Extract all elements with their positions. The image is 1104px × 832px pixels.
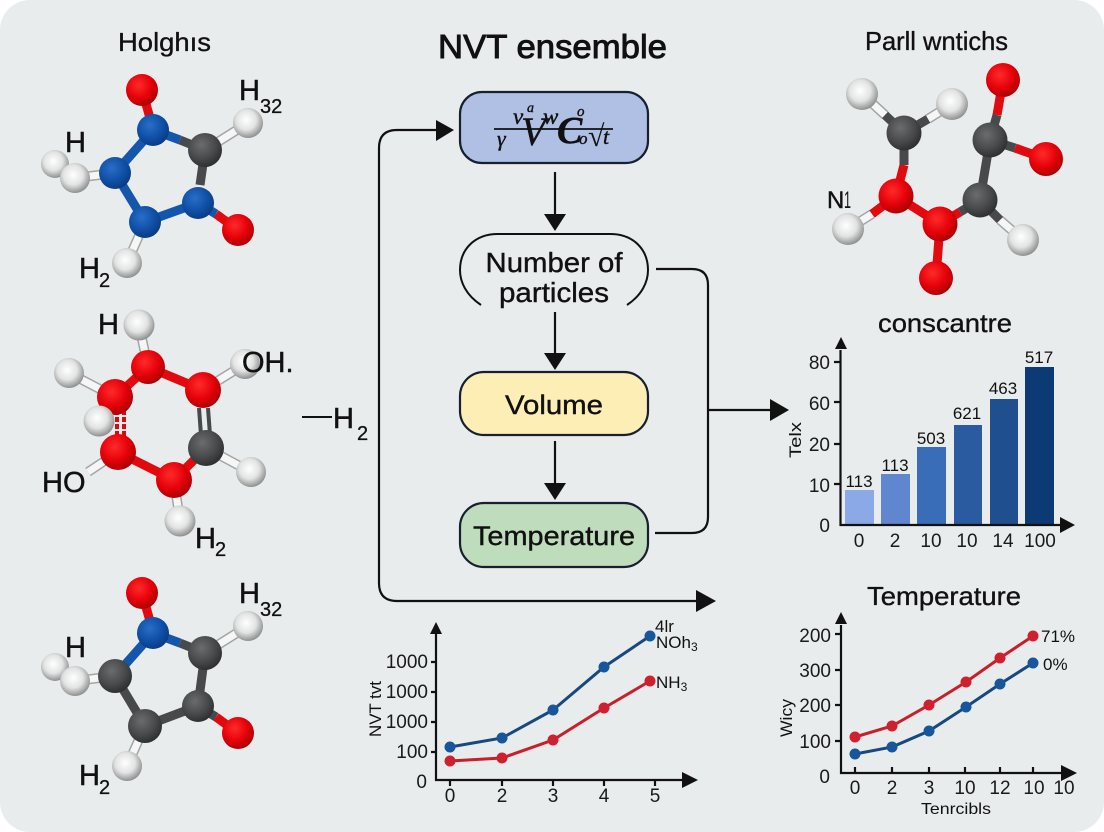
arrow: particles to volume (544, 312, 566, 370)
panel: bottom left molecule: 2 (99, 777, 110, 799)
flowchart (379, 92, 789, 612)
panel: top left molecule: H (79, 253, 100, 285)
line chart: NVT: 4 (599, 786, 610, 807)
node: number of particles: particles (499, 277, 609, 308)
bar chart: 14 (992, 531, 1014, 552)
node: volume (460, 372, 648, 435)
panel: bottom left molecule: H (65, 632, 86, 664)
line chart: NVT: 5 (650, 786, 660, 807)
line chart: temperature: Tenrcibls (921, 801, 991, 818)
bar chart: 503 (917, 429, 945, 448)
heading: right molecule: Parll wntichs (865, 26, 1008, 56)
formula box: a (527, 101, 534, 116)
panel: top left molecule (41, 27, 282, 292)
formula box: v (513, 104, 524, 129)
line chart: NVT: 0 (445, 786, 455, 807)
line chart: NVT: 2 (497, 786, 507, 807)
line chart: NVT: 4lr (655, 617, 674, 636)
panel: middle left molecule: H (195, 523, 216, 555)
bar chart: 2 (890, 531, 900, 552)
bar chart (786, 308, 1075, 552)
line chart: temperature: 200 (799, 696, 831, 717)
chart heading: Temperature (867, 581, 1021, 611)
formula box (460, 92, 648, 163)
panel: top left molecule: 32 (260, 96, 282, 118)
panel: top left molecule: H (239, 75, 260, 107)
bar chart: 517 (1025, 348, 1053, 367)
panel: bottom left molecule: H (239, 578, 260, 610)
bar chart: Telx (786, 421, 805, 458)
heading: left molecule: Holghıs (118, 27, 211, 57)
line chart: NVT: 1000 (386, 712, 428, 733)
line chart: temperature: 0% (1043, 655, 1068, 674)
formula box: w (543, 104, 559, 129)
bar chart: 463 (989, 379, 1017, 398)
bar chart: 0 (819, 516, 830, 537)
panel: top left molecule: H (65, 127, 86, 159)
line chart: temperature: 10 (954, 778, 976, 799)
bar chart: 100 (1024, 531, 1056, 552)
line chart: temperature: 300 (799, 661, 831, 682)
line chart: temperature (777, 581, 1077, 818)
line chart: NVT: 1000 (386, 682, 428, 703)
node: volume: Volume (505, 390, 603, 420)
bar chart: 0 (854, 531, 864, 552)
line chart: temperature: 10 (1053, 778, 1075, 799)
line chart: NVT (366, 617, 698, 807)
bar chart: 10 (956, 531, 978, 552)
bar chart: 621 (953, 404, 981, 423)
line chart: NVT: 3 (691, 640, 698, 654)
node: temperature (460, 503, 648, 567)
bar chart: 10 (809, 476, 830, 497)
formula box: √ (588, 120, 605, 153)
panel: middle left molecule: OH. (242, 347, 294, 379)
label: H2 byproduct: 2 (357, 423, 368, 445)
formula box: V (521, 109, 550, 154)
arrow: feedback to bar chart (655, 269, 789, 533)
panel: middle left molecule (42, 309, 294, 561)
chart heading: conscantre (878, 308, 1012, 338)
formula box: γ (497, 126, 507, 151)
line chart: temperature: 71% (1041, 627, 1075, 646)
bar chart: 113 (845, 472, 873, 491)
line chart: temperature: Wicy (777, 698, 796, 737)
node: number of particles (460, 234, 648, 308)
line chart: temperature: 200 (799, 626, 831, 647)
panel: bottom left molecule: 32 (260, 599, 282, 621)
node: number of particles: Number of (486, 247, 623, 278)
line chart: temperature: 0 (819, 767, 830, 788)
line chart: temperature: 3 (924, 778, 934, 799)
bar chart: 20 (809, 435, 830, 456)
line chart: NVT: 100 (396, 742, 428, 763)
panel: top right molecule (827, 26, 1063, 295)
line chart: NVT: 3 (548, 786, 558, 807)
line chart: NVT: NH (656, 673, 681, 692)
bars (845, 367, 1054, 525)
formula box: C (557, 110, 583, 152)
line chart: temperature: 2 (887, 778, 897, 799)
line chart: NVT: NVT tvt (366, 681, 385, 737)
label: H2 byproduct: H (333, 403, 354, 435)
formula box: t (603, 124, 610, 149)
panel: top right molecule: 1 (844, 187, 851, 214)
panel: top left molecule: 2 (99, 270, 110, 292)
arrow: left loop (379, 120, 716, 612)
formula box: o (579, 129, 588, 148)
title: NVT ensemble (438, 28, 667, 65)
panel: top right molecule: N (827, 187, 844, 214)
line chart: NVT: NOh (656, 633, 691, 652)
line chart: temperature: 10 (1023, 778, 1045, 799)
bar chart: 80 (809, 353, 830, 374)
panel: middle left molecule: H (98, 309, 119, 341)
line chart: NVT: 0 (416, 772, 427, 793)
arrow: formula to particles (544, 172, 566, 231)
panel: middle left molecule: HO (42, 467, 86, 499)
panel: bottom left molecule: H (79, 760, 100, 792)
arrow: volume to temperature (544, 441, 566, 500)
line chart: NVT: 1000 (386, 652, 428, 673)
bar chart: 10 (920, 531, 942, 552)
label: H2 byproduct (302, 403, 368, 445)
panel: bottom left molecule (41, 577, 282, 799)
line chart: temperature: 0 (850, 778, 860, 799)
formula box: o (577, 104, 585, 120)
node: temperature: Temperature (473, 521, 635, 551)
bar chart: 60 (809, 394, 830, 415)
line chart: temperature: 12 (989, 778, 1011, 799)
panel: middle left molecule: 2 (215, 539, 226, 561)
line chart: NVT: 3 (681, 680, 688, 694)
line chart: temperature: 100 (799, 732, 831, 753)
bar chart: 113 (881, 456, 909, 475)
